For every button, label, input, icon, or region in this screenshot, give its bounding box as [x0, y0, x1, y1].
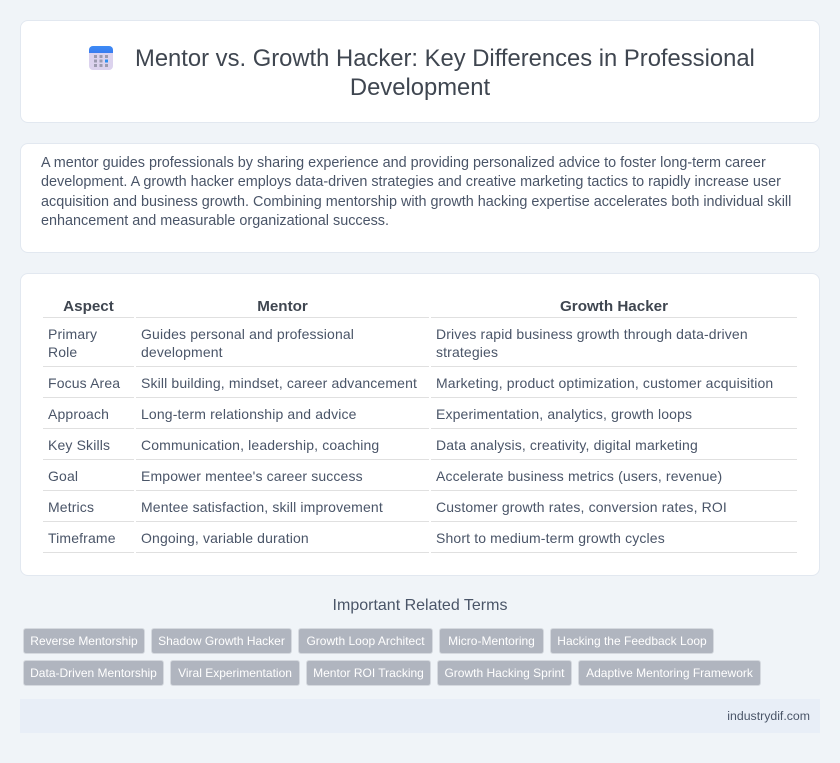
row: Key Skills: Key Skills	[48, 437, 110, 453]
row: Approach	[48, 406, 692, 422]
row: Primary Role: development	[141, 344, 223, 360]
row: Focus Area: Skill building, mindset, career advancement	[141, 375, 417, 391]
row: Primary Role: Role	[48, 344, 77, 360]
related term tags: Growth Loop Architect	[306, 634, 425, 648]
row: Key Skills	[48, 437, 698, 453]
related term tags: Mentor ROI Tracking	[313, 666, 424, 680]
related term tags: Data-Driven Mentorship	[30, 666, 157, 680]
row: Key Skills: Communication, leadership, coaching	[141, 437, 379, 453]
row: Timeframe: Timeframe	[48, 530, 116, 546]
header row: Mentor	[257, 298, 308, 315]
heading: related terms: Important Related Terms	[333, 597, 507, 614]
title	[135, 45, 755, 101]
row: Timeframe: Short to medium-term growth cycles	[436, 530, 665, 546]
row: Key Skills: Data analysis, creativity, digital marketing	[436, 437, 698, 453]
row: Metrics: Metrics	[48, 499, 94, 515]
row: Metrics: Mentee satisfaction, skill improvement	[141, 499, 383, 515]
panel: title header	[20, 20, 820, 123]
row: Goal	[48, 468, 722, 484]
row: Goal: Accelerate business metrics (users, revenue)	[436, 468, 722, 484]
row: Timeframe	[48, 530, 665, 546]
row: Approach: Experimentation, analytics, growth loops	[436, 406, 692, 422]
icon: calendar	[89, 46, 113, 70]
title: Development	[350, 74, 490, 101]
row: Focus Area: Marketing, product optimization, customer acquisition	[436, 375, 773, 391]
related term tags: Growth Hacking Sprint	[444, 666, 565, 680]
row: Goal: Goal	[48, 468, 78, 484]
related term tags: Adaptive Mentoring Framework	[586, 666, 753, 680]
header row: Aspect	[63, 298, 114, 315]
panel: comparison table	[20, 273, 820, 576]
related term tags: Hacking the Feedback Loop	[557, 634, 707, 648]
footer bar	[20, 699, 820, 733]
header row: Growth Hacker	[560, 298, 668, 315]
comparison table content	[43, 298, 797, 553]
row: Timeframe: Ongoing, variable duration	[141, 530, 309, 546]
title: Mentor vs. Growth Hacker: Key Differences in Professional	[135, 45, 755, 72]
row: Focus Area	[48, 375, 773, 391]
row: Primary Role: strategies	[436, 344, 498, 360]
row: Primary Role: Drives rapid business growth through data-driven	[436, 326, 748, 342]
row: Focus Area: Focus Area	[48, 375, 120, 391]
row: Metrics	[48, 499, 727, 515]
related term tags: Micro-Mentoring	[448, 634, 535, 648]
row: Primary Role: Guides personal and professional	[141, 326, 354, 342]
row: Goal: Empower mentee's career success	[141, 468, 363, 484]
intro paragraph: A mentor guides professionals by sharing experience and providing personalized advice to foster long-term career development. A growth hacker employs data-driven strategies and creative marketing tactics to rapidly increase user acquisition and business growth. Combining mentorship with growth hacking expertise accelerates both individual skill enhancement and measurable organizational success.	[41, 155, 791, 229]
footer source: industrydif.com	[727, 709, 810, 723]
related term tags: Shadow Growth Hacker	[158, 634, 285, 648]
header row	[63, 298, 668, 315]
row: Approach: Long-term relationship and advice	[141, 406, 357, 422]
related term tags: Viral Experimentation	[178, 666, 292, 680]
row: Primary Role	[48, 326, 748, 360]
row: Approach: Approach	[48, 406, 109, 422]
row: Primary Role: Primary	[48, 326, 97, 342]
row: Metrics: Customer growth rates, conversion rates, ROI	[436, 499, 727, 515]
related term tags	[23, 628, 761, 686]
related term tags: Reverse Mentorship	[30, 634, 138, 648]
panel: introduction	[20, 143, 820, 253]
